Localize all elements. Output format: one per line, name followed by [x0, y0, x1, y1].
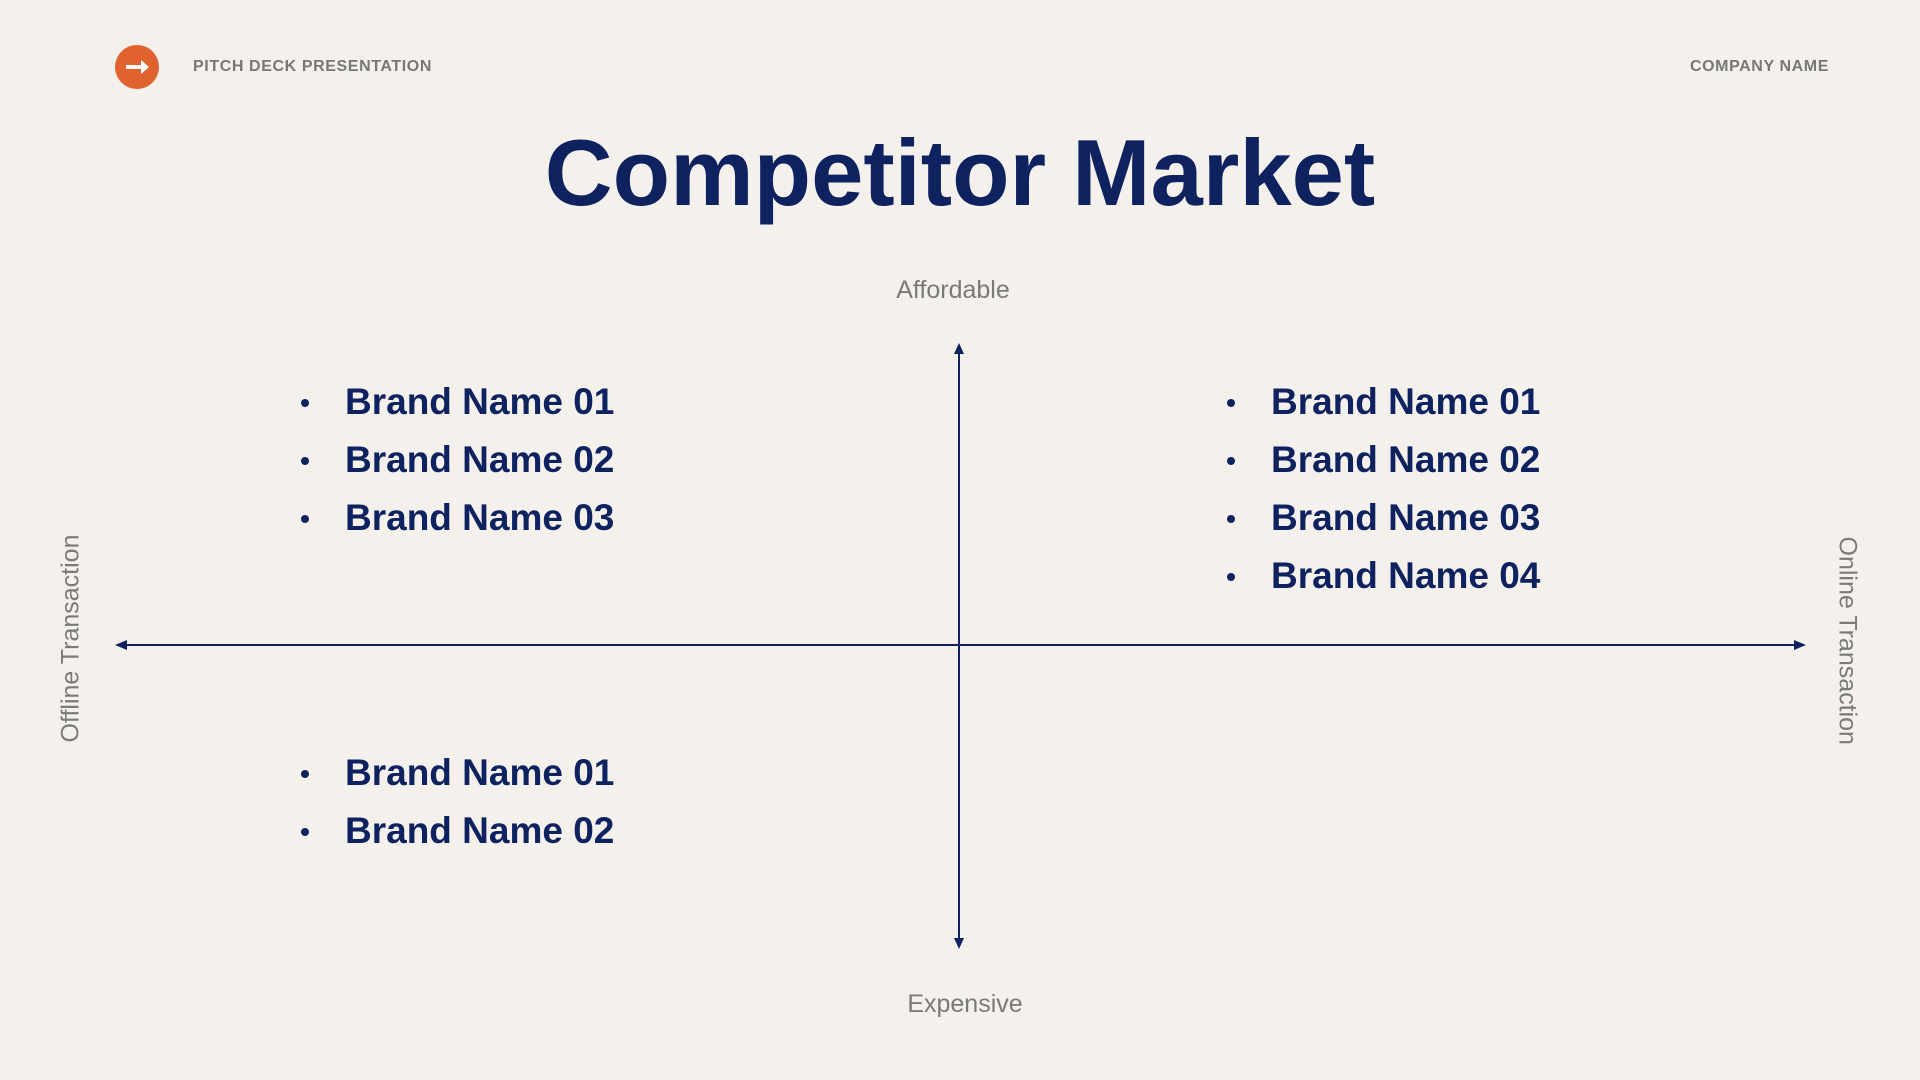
- title: Competitor Market: [545, 120, 1375, 225]
- header: company name: COMPANY NAME: [1690, 58, 1829, 75]
- list: bottom-left quadrant: [301, 752, 614, 851]
- list: top-right quadrant: Brand Name 03: [1271, 497, 1540, 538]
- list: top-right quadrant: Brand Name 01: [1271, 381, 1540, 422]
- label: offline transaction: Offline Transaction: [56, 535, 84, 742]
- list: top-right quadrant: [1227, 381, 1540, 596]
- list: top-left quadrant: [301, 381, 614, 538]
- list: top-right quadrant: Brand Name 02: [1271, 439, 1540, 480]
- list: top-left quadrant: Brand Name 02: [345, 439, 614, 480]
- label: online transaction: Online Transaction: [1834, 536, 1862, 745]
- list: bottom-left quadrant: Brand Name 01: [345, 752, 614, 793]
- list: top-left quadrant: Brand Name 03: [345, 497, 614, 538]
- icon: orange arrow circle: [115, 45, 159, 89]
- label: affordable: Affordable: [896, 276, 1010, 304]
- list: bottom-left quadrant: Brand Name 02: [345, 810, 614, 851]
- label: expensive: Expensive: [907, 990, 1023, 1018]
- list: top-right quadrant: Brand Name 04: [1271, 555, 1540, 596]
- list: top-left quadrant: Brand Name 01: [345, 381, 614, 422]
- header: pitch deck: PITCH DECK PRESENTATION: [193, 58, 432, 75]
